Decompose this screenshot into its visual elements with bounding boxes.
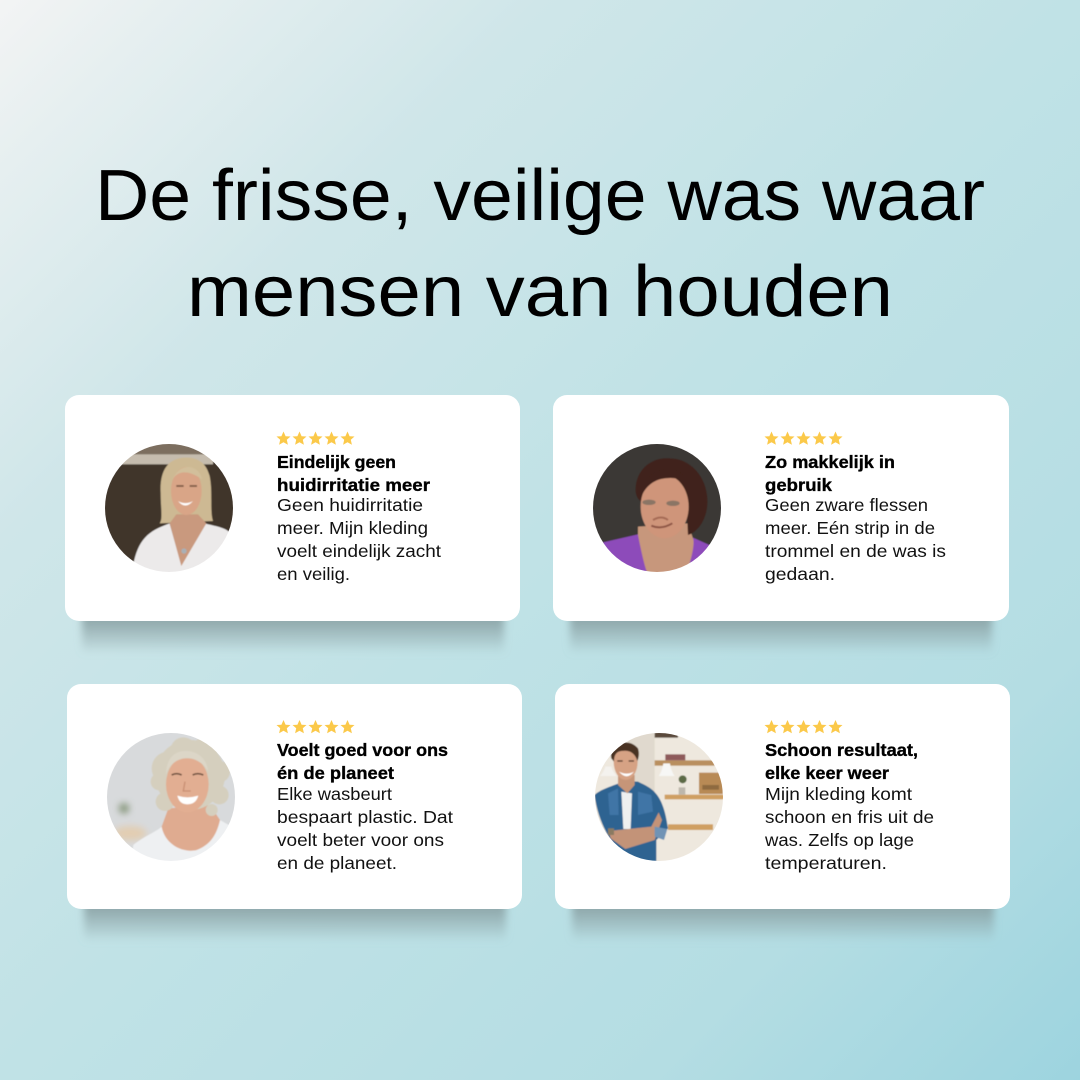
panel: review card 1 xyxy=(65,395,520,654)
star rating xyxy=(276,432,354,445)
review text: gedaan. xyxy=(765,564,835,584)
review heading: elke keer weer xyxy=(765,763,889,783)
review text: was. Zelfs op lage xyxy=(764,830,914,850)
review heading: Schoon resultaat, xyxy=(765,740,918,760)
title xyxy=(95,156,985,332)
review text: Elke wasbeurt xyxy=(277,784,392,804)
review heading xyxy=(277,740,448,783)
portrait: man in denim shirt xyxy=(595,733,723,861)
review heading: Zo makkelijk in xyxy=(765,452,895,472)
review text: schoon en fris uit de xyxy=(765,807,934,827)
portrait: dark-haired woman xyxy=(593,444,721,572)
portrait: grey-haired woman xyxy=(107,733,235,861)
review heading: gebruik xyxy=(765,475,832,495)
review text xyxy=(765,495,946,584)
review text: en de planeet. xyxy=(277,853,397,873)
panel: review card 2 xyxy=(553,395,1009,654)
review heading: Eindelijk geen xyxy=(277,452,396,472)
review heading: Voelt goed voor ons xyxy=(277,740,448,760)
review text: bespaart plastic. Dat xyxy=(277,807,453,827)
review text: Mijn kleding komt xyxy=(765,784,912,804)
review heading xyxy=(765,452,895,495)
review text xyxy=(277,784,453,873)
review text: Geen zware flessen xyxy=(765,495,928,515)
star rating xyxy=(764,432,842,445)
review text: Geen huidirritatie xyxy=(277,495,423,515)
review text: temperaturen. xyxy=(765,853,887,873)
review text: trommel en de was is xyxy=(765,541,946,561)
review text: meer. Eén strip in de xyxy=(765,518,935,538)
title: De frisse, veilige was waar xyxy=(95,156,985,236)
review heading xyxy=(277,452,430,495)
star rating xyxy=(276,720,354,733)
panel: review card 3 xyxy=(67,684,522,942)
review heading: huidirritatie meer xyxy=(277,475,430,495)
review text: voelt beter voor ons xyxy=(277,830,444,850)
review text: en veilig. xyxy=(277,564,350,584)
review text: meer. Mijn kleding xyxy=(277,518,428,538)
review heading xyxy=(765,740,918,783)
portrait: blonde woman xyxy=(105,444,233,572)
review text xyxy=(764,784,934,873)
review text xyxy=(277,495,441,584)
title: mensen van houden xyxy=(187,252,893,332)
review heading: én de planeet xyxy=(277,763,394,783)
review text: voelt eindelijk zacht xyxy=(277,541,441,561)
panel: review card 4 xyxy=(555,684,1010,942)
star rating xyxy=(764,720,842,733)
